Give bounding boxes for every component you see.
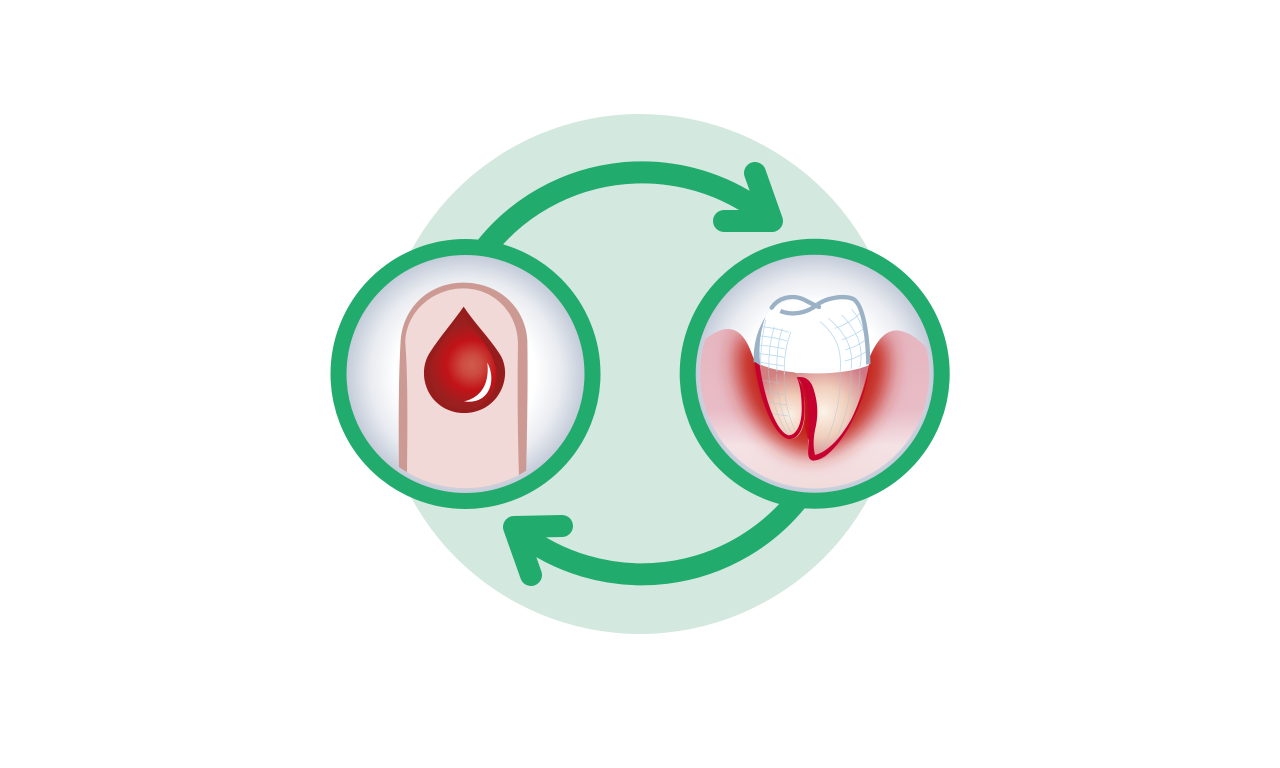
enamel grid (756, 309, 868, 374)
arrow: top, left to right (478, 172, 772, 258)
icon: tooth (754, 297, 869, 461)
tooth root (755, 362, 869, 460)
inflammation glow (736, 333, 888, 455)
icon: blood drop (424, 307, 505, 413)
panel: tooth with inflamed gum (688, 247, 942, 501)
root grid (760, 368, 860, 450)
arrow: bottom, right to left (514, 496, 800, 575)
panel: fingertip with blood drop (338, 247, 592, 507)
icon: finger (399, 283, 528, 507)
tooth crown (754, 297, 869, 374)
red root outline (754, 362, 869, 461)
ring: tooth panel (688, 247, 942, 501)
background circle (380, 114, 900, 634)
icon: gum (698, 329, 931, 491)
ring: finger panel (338, 247, 592, 501)
tooth outline (754, 297, 868, 366)
